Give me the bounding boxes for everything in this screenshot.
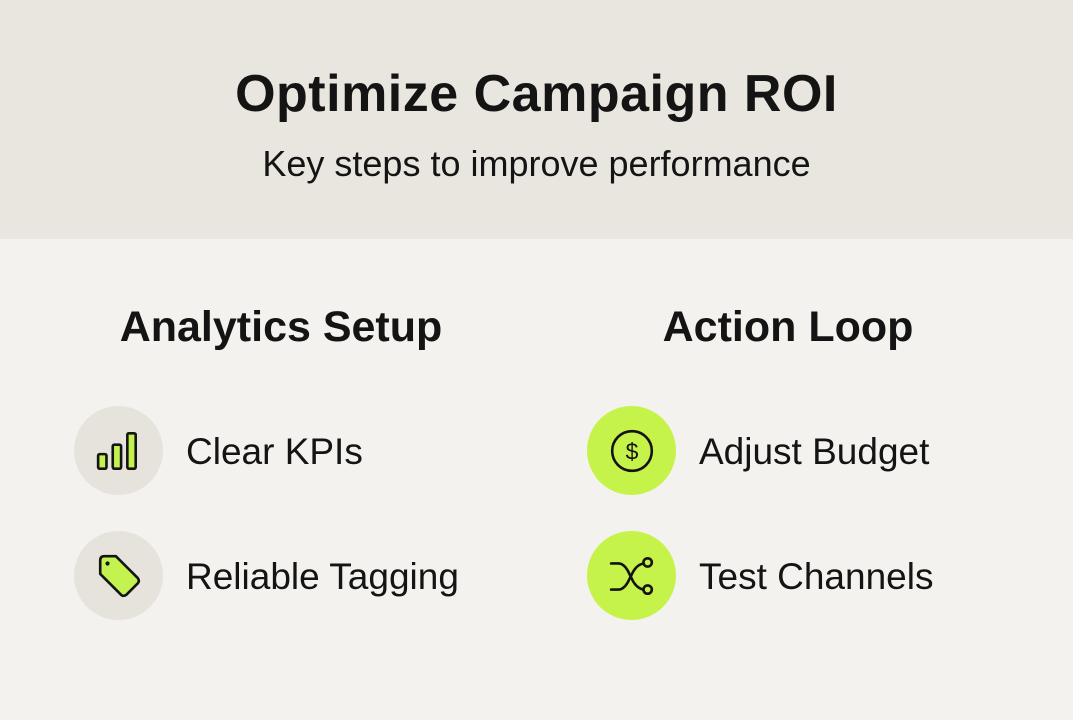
heading: Action Loop: Action Loop (663, 303, 913, 351)
icon: bar chart (74, 406, 163, 495)
item: Reliable Tagging: Reliable Tagging (186, 556, 459, 597)
title: Optimize Campaign ROI (235, 65, 838, 123)
item: Clear KPIs (74, 406, 363, 495)
item: Test Channels: Test Channels (699, 556, 933, 597)
item: Test Channels (587, 531, 933, 620)
item: Adjust Budget (587, 406, 930, 495)
heading: Analytics Setup: Analytics Setup (120, 303, 442, 351)
item: Reliable Tagging (74, 531, 459, 620)
icon: tag (74, 531, 163, 620)
item: Clear KPIs: Clear KPIs (186, 431, 363, 472)
item: Adjust Budget: Adjust Budget (699, 431, 929, 472)
header band (0, 0, 1073, 239)
subtitle: Key steps to improve performance (262, 143, 811, 184)
icon: dollar coin (587, 406, 676, 495)
icon: dollar coin: $ (625, 438, 638, 464)
icon: shuffle (587, 531, 676, 620)
